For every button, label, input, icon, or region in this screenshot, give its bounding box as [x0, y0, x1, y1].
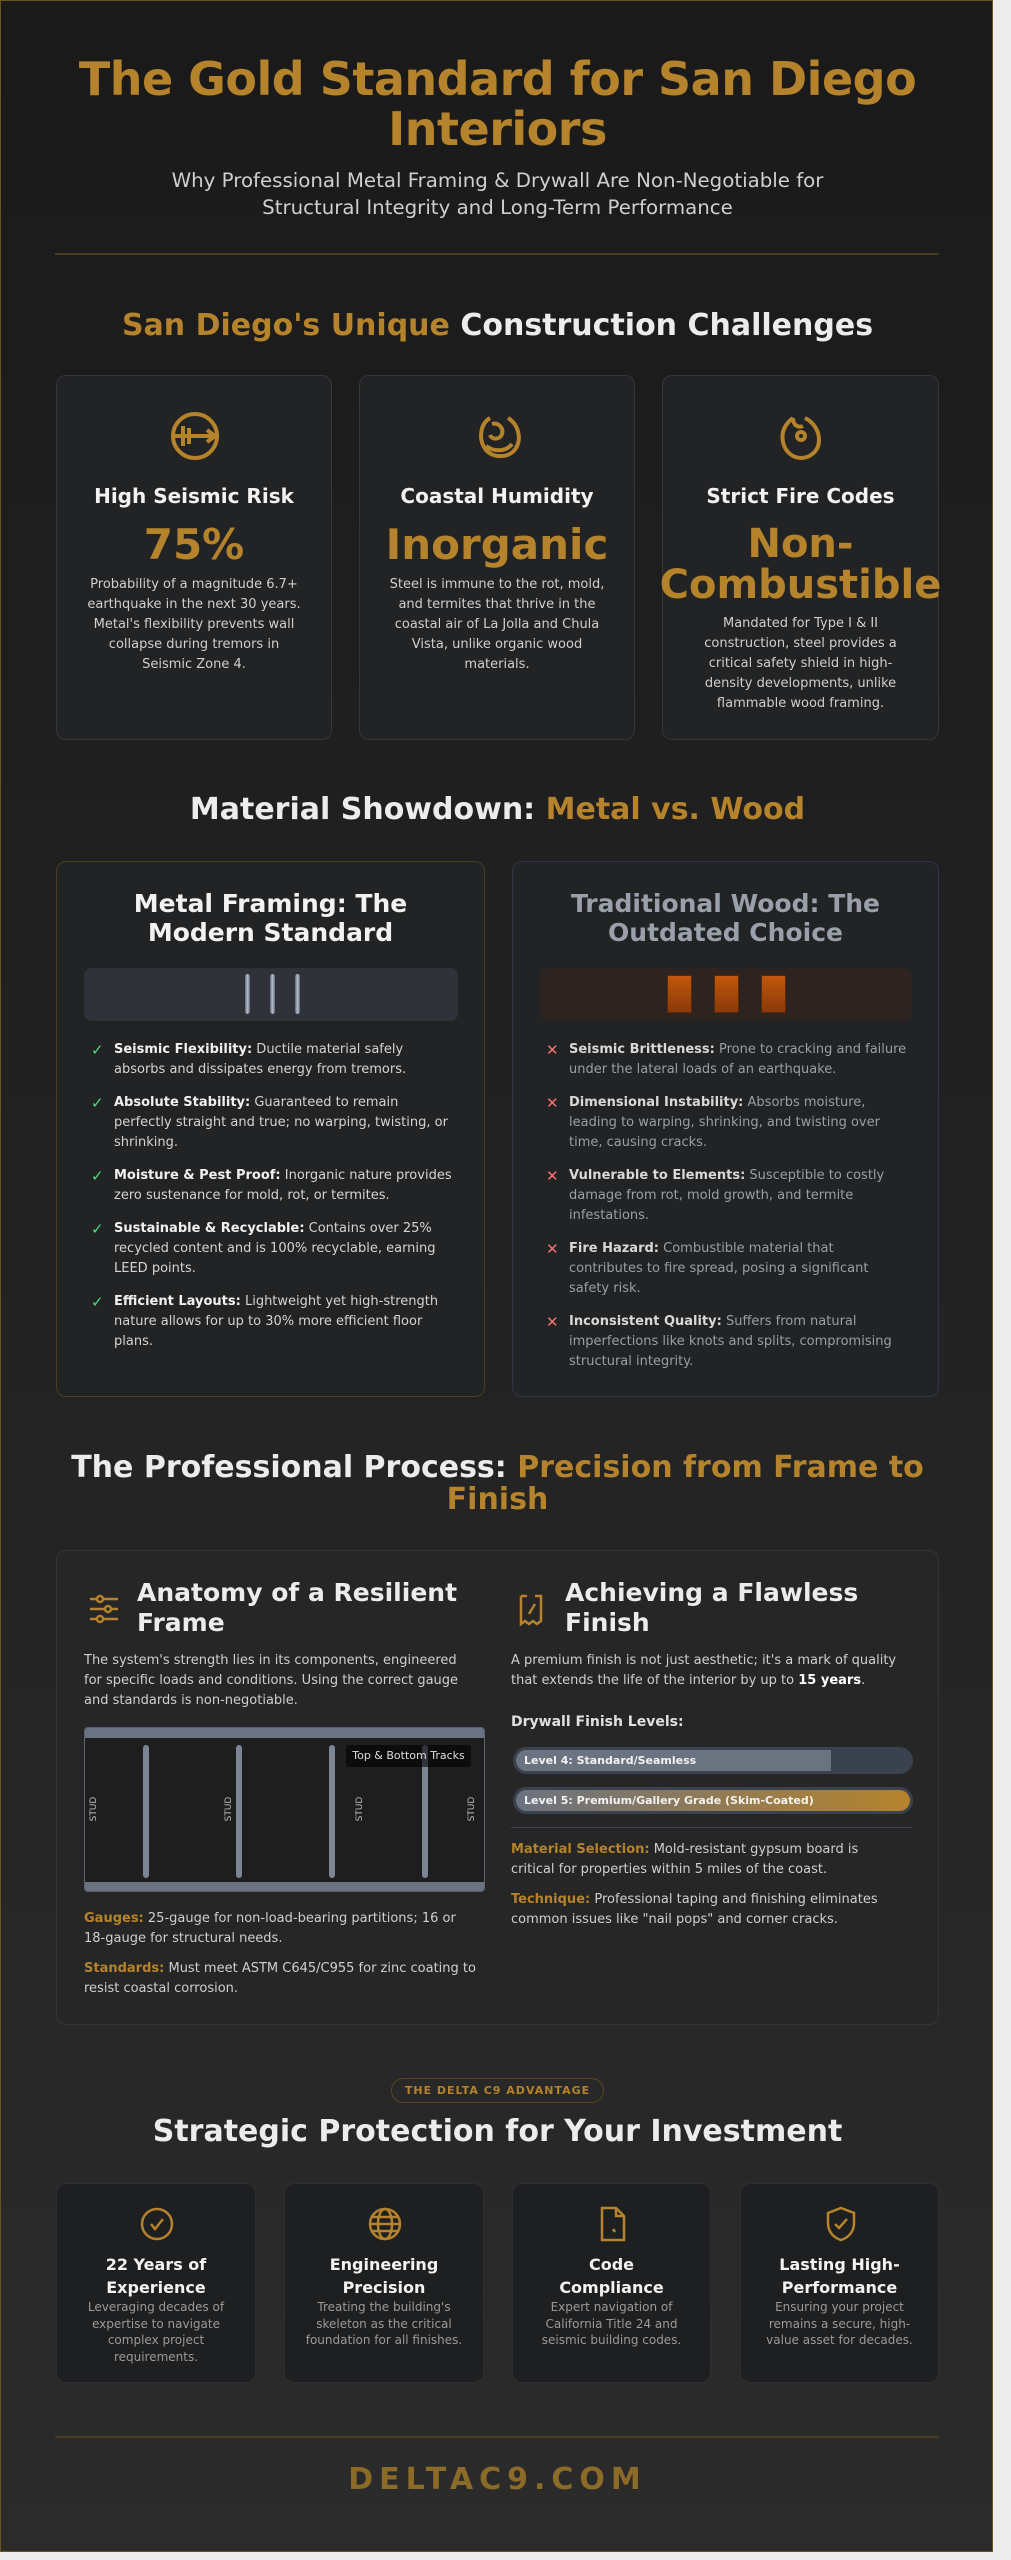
desc: foundation for all finishes. — [306, 2333, 462, 2347]
left desc: for specific loads and conditions. Using the correct gauge — [84, 1673, 458, 1688]
heading: process — [71, 1450, 924, 1517]
title — [106, 2255, 206, 2297]
standards text — [84, 1961, 476, 1996]
list: wood cons: Dimensional Instability: Absorbs moisture, — [569, 1095, 865, 1110]
bar: level 5 — [513, 1787, 913, 1814]
desc: Ensuring your project — [775, 2300, 904, 2314]
left desc: and standards is non-negotiable. — [84, 1693, 298, 1708]
title: Code — [589, 2255, 634, 2274]
desc: remains a secure, high- — [769, 2316, 910, 2330]
panel: metal framing: ✓ — [91, 1094, 104, 1112]
desc: seismic building codes. — [542, 2333, 681, 2347]
title: Experience — [106, 2278, 206, 2297]
panel: metal framing: ✓ — [91, 1041, 104, 1059]
panel: wood — [512, 861, 939, 1397]
title: Performance — [782, 2278, 897, 2297]
card title: Traditional Wood: The — [571, 889, 880, 918]
list: wood cons — [546, 1041, 906, 1369]
heading: showdown: Material Showdown: Metal vs. Wood — [190, 792, 805, 827]
stat: Inorganic — [386, 520, 608, 569]
stat: Non- — [747, 521, 854, 567]
desc: Probability of a magnitude 6.7+ — [90, 577, 298, 592]
card title: Metal Framing: The — [134, 889, 407, 918]
desc: Steel is immune to the rot, mold, — [390, 577, 604, 592]
list: wood cons: leading to warping, shrinking, and twisting over — [569, 1115, 880, 1130]
desc — [88, 2300, 224, 2364]
title: Engineering — [330, 2255, 438, 2274]
desc — [87, 577, 301, 672]
card title: Modern Standard — [148, 918, 393, 947]
icon: check circle — [140, 2208, 174, 2240]
list: metal pros: Efficient Layouts: Lightweight yet high-strength — [114, 1294, 438, 1309]
bar: level 4 — [513, 1747, 913, 1774]
desc — [542, 2300, 681, 2347]
title — [79, 52, 916, 156]
list: metal pros: absorbs and dissipates energy from tremors. — [114, 1062, 406, 1077]
list: metal pros: zero sustenance for mold, rot, or termites. — [114, 1188, 390, 1203]
panel: wood: ✕ — [546, 1240, 559, 1258]
desc: collapse during tremors in — [109, 637, 279, 652]
stat: Combustible — [660, 562, 941, 608]
standards text: Standards: Must meet ASTM C645/C955 for zinc coating to — [84, 1961, 476, 1976]
stat — [660, 521, 941, 608]
right desc: A premium finish is not just aesthetic; it's a mark of quality — [511, 1653, 896, 1668]
frame diagram — [84, 1727, 485, 1892]
desc — [766, 2300, 913, 2347]
title: The Gold Standard for San Diego — [79, 52, 916, 106]
material selection text: critical for properties within 5 miles of the coast. — [511, 1862, 827, 1877]
desc: Leveraging decades of — [88, 2300, 224, 2314]
desc: critical safety shield in high- — [709, 656, 892, 671]
list: wood cons: safety risk. — [569, 1281, 641, 1296]
list: wood cons: contributes to fire spread, posing a significant — [569, 1261, 868, 1276]
subtitle: Structural Integrity and Long-Term Performance — [262, 196, 733, 219]
desc: requirements. — [114, 2350, 198, 2364]
title: Precision — [343, 2278, 425, 2297]
list: metal pros: nature allows for up to 30% more efficient floor — [114, 1314, 422, 1329]
left heading — [137, 1578, 457, 1637]
bar: level 4: Level 4: Standard/Seamless — [524, 1754, 696, 1767]
heading: process: The Professional Process: Precision from Frame to — [71, 1450, 924, 1485]
desc: value asset for decades. — [766, 2333, 913, 2347]
panel: metal framing: ✓ — [91, 1220, 104, 1238]
desc: Treating the building's — [317, 2300, 451, 2314]
panel: wood: ✕ — [546, 1167, 559, 1185]
right heading — [565, 1578, 858, 1637]
right heading: Achieving a Flawless — [565, 1578, 858, 1607]
icon: finish tool — [520, 1594, 542, 1626]
panel: process — [56, 1550, 939, 2025]
list: wood cons: Fire Hazard: Combustible material that — [569, 1241, 834, 1256]
list: metal pros: plans. — [114, 1334, 153, 1349]
frame diagram: STUD — [89, 1797, 99, 1821]
panel: metal framing: ✓ — [91, 1293, 104, 1311]
title — [559, 2255, 664, 2297]
panel: wood: ✕ — [546, 1313, 559, 1331]
frame diagram: STUD — [224, 1797, 234, 1821]
technique text: Technique: Professional taping and finishing eliminates — [511, 1892, 878, 1907]
left desc: The system's strength lies in its components, engineered — [84, 1653, 457, 1668]
card title — [571, 889, 880, 947]
left heading: Anatomy of a Resilient — [137, 1578, 457, 1607]
card title: High Seismic Risk — [94, 484, 294, 508]
gauges text: Gauges: 25-gauge for non-load-bearing partitions; 16 or — [84, 1911, 456, 1926]
list: wood cons: structural integrity. — [569, 1354, 693, 1369]
title — [779, 2255, 900, 2297]
desc: Mandated for Type I & II — [723, 616, 878, 631]
desc: Vista, unlike organic wood — [412, 637, 582, 652]
panel: metal framing: ✓ — [91, 1167, 104, 1185]
material selection text — [511, 1842, 858, 1877]
title: Compliance — [559, 2278, 664, 2297]
stat: 75% — [144, 520, 244, 569]
panel: metal framing — [56, 861, 485, 1397]
list: wood cons: Seismic Brittleness: Prone to cracking and failure — [569, 1042, 906, 1057]
list: metal pros: Sustainable & Recyclable: Contains over 25% — [114, 1221, 432, 1236]
panel: wood: ✕ — [546, 1041, 559, 1059]
subtitle — [172, 169, 824, 219]
desc: expertise to navigate — [92, 2316, 220, 2330]
title: 22 Years of — [106, 2255, 206, 2274]
desc — [306, 2300, 462, 2347]
pill: delta c9 advantage — [391, 2078, 604, 2103]
card: engineering — [284, 2183, 484, 2383]
heading: strategic protection: Strategic Protection for Your Investment — [153, 2114, 842, 2149]
title: Interiors — [388, 102, 607, 156]
panel: wood: ✕ — [546, 1094, 559, 1112]
frame diagram: STUD — [467, 1797, 477, 1821]
title — [330, 2255, 438, 2297]
heading: challenges: San Diego's Unique Construction Challenges — [122, 308, 873, 343]
list: metal pros — [91, 1041, 452, 1349]
desc: Metal's flexibility prevents wall — [94, 617, 294, 632]
material selection text: Material Selection: Mold-resistant gypsum board is — [511, 1842, 858, 1857]
list: metal pros: LEED points. — [114, 1261, 196, 1276]
list: metal pros: Seismic Flexibility: Ductile material safely — [114, 1042, 403, 1057]
desc: Expert navigation of — [551, 2300, 672, 2314]
desc: flammable wood framing. — [717, 696, 884, 711]
heading: process: Finish — [447, 1482, 548, 1517]
list: wood cons: time, causing cracks. — [569, 1135, 707, 1150]
card: code compliance — [512, 2183, 711, 2383]
card: lasting performance — [740, 2183, 939, 2383]
list: wood cons: damage from rot, mold growth, and termite — [569, 1188, 853, 1203]
list: wood cons: infestations. — [569, 1208, 649, 1223]
illustration: wood studs — [540, 968, 912, 1021]
panel: humidity — [359, 375, 635, 740]
list: metal pros: shrinking. — [114, 1135, 178, 1150]
icon: humidity — [479, 416, 521, 458]
list: wood cons: Inconsistent Quality: Suffers from natural — [569, 1314, 857, 1329]
icon: globe — [368, 2208, 402, 2240]
card title: Outdated Choice — [608, 918, 843, 947]
footer: site: DELTAC9.COM — [348, 2462, 647, 2497]
frame diagram: Top & Bottom Tracks — [352, 1749, 465, 1762]
bar: level 5: Level 5: Premium/Gallery Grade (Skim-Coated) — [524, 1794, 814, 1807]
illustration: metal studs — [84, 968, 458, 1021]
desc — [704, 616, 897, 711]
card title — [134, 889, 407, 947]
right desc: that extends the life of the interior by up to 15 years. — [511, 1673, 865, 1688]
card title: Strict Fire Codes — [706, 484, 895, 508]
desc: coastal air of La Jolla and Chula — [395, 617, 599, 632]
desc: earthquake in the next 30 years. — [87, 597, 301, 612]
icon: seismic — [171, 412, 219, 460]
gauges text — [84, 1911, 456, 1946]
left heading: Frame — [137, 1608, 225, 1637]
standards text: resist coastal corrosion. — [84, 1981, 238, 1996]
subtitle: Why Professional Metal Framing & Drywall Are Non-Negotiable for — [172, 169, 823, 192]
frame diagram: STUD — [355, 1797, 365, 1821]
panel: fire — [662, 375, 939, 740]
card: experience — [56, 2183, 256, 2383]
left desc — [84, 1653, 458, 1708]
desc: Seismic Zone 4. — [142, 657, 246, 672]
desc: California Title 24 and — [546, 2316, 678, 2330]
gauges text: 18-gauge for structural needs. — [84, 1931, 282, 1946]
list: metal pros: recycled content and is 100% recyclable, earning — [114, 1241, 436, 1256]
right heading: Finish — [565, 1608, 650, 1637]
icon: fire — [780, 416, 821, 460]
list: metal pros: perfectly straight and true; no warping, twisting, or — [114, 1115, 448, 1130]
icon: shield — [826, 2206, 856, 2242]
desc: and termites that thrive in the — [398, 597, 596, 612]
card title: Coastal Humidity — [400, 484, 594, 508]
icon: sliders — [90, 1594, 118, 1624]
list: wood cons: imperfections like knots and splits, compromising — [569, 1334, 892, 1349]
list: metal pros: Moisture & Pest Proof: Inorganic nature provides — [114, 1168, 452, 1183]
desc: materials. — [464, 657, 530, 672]
list: wood cons: under the lateral loads of an earthquake. — [569, 1062, 836, 1077]
desc: complex project — [108, 2333, 204, 2347]
list: wood cons: Vulnerable to Elements: Susceptible to costly — [569, 1168, 884, 1183]
technique text: common issues like "nail pops" and corner cracks. — [511, 1912, 838, 1927]
desc: skeleton as the critical — [316, 2316, 452, 2330]
icon: document — [600, 2206, 626, 2242]
list: metal pros: Absolute Stability: Guaranteed to remain — [114, 1095, 398, 1110]
right desc — [511, 1653, 896, 1688]
title: Lasting High- — [779, 2255, 900, 2274]
panel: seismic — [56, 375, 332, 740]
desc: construction, steel provides a — [704, 636, 897, 651]
desc: density developments, unlike — [705, 676, 896, 691]
finish levels label: Drywall Finish Levels: — [511, 1714, 684, 1730]
technique text — [511, 1892, 878, 1927]
desc — [390, 577, 604, 672]
pill: delta c9 advantage: THE DELTA C9 ADVANTAGE — [405, 2084, 590, 2097]
